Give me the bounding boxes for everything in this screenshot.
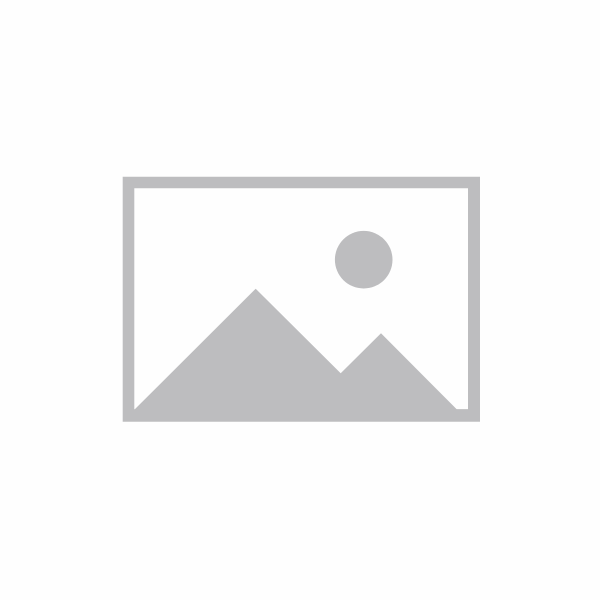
icon: mountains xyxy=(134,289,468,410)
icon: sun xyxy=(335,231,393,288)
icon: picture frame xyxy=(123,177,480,422)
